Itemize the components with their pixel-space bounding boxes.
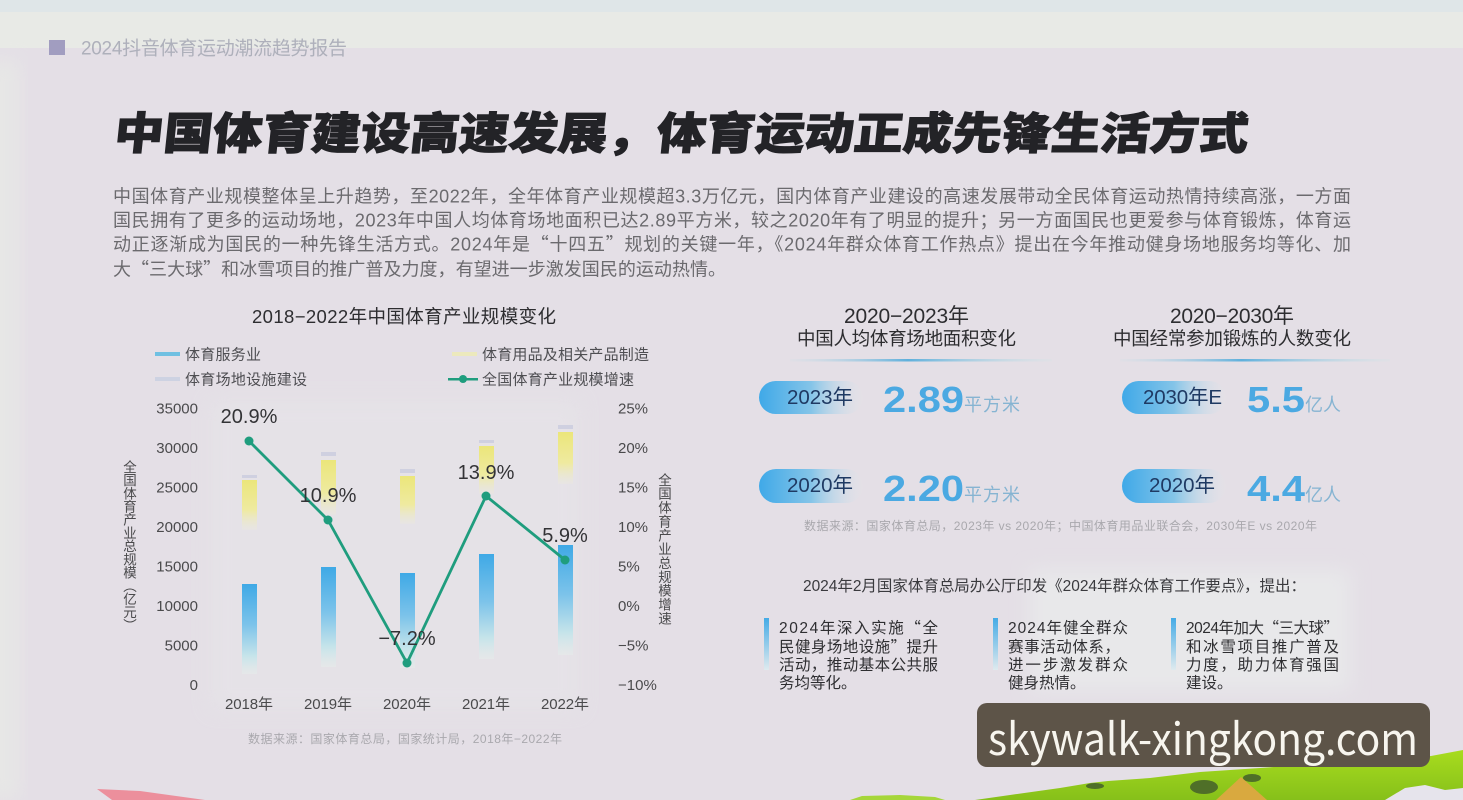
growth labels: 13.9%: [458, 462, 515, 484]
legend: 体育服务业: [185, 346, 261, 364]
icon: header square: [49, 40, 65, 55]
right axis: 5%: [618, 558, 640, 576]
panel: regular exercisers: [1113, 305, 1390, 509]
stat: 2020: [759, 468, 1020, 509]
left axis: [156, 400, 198, 694]
stat: 2023: 平方米: [964, 395, 1020, 415]
policy item 1: 务均等化。: [779, 674, 857, 692]
stat: 2020: 2020年: [787, 474, 853, 497]
intro text block: 大“三大球”和冰雪项目的推广普及力度，有望进一步激发国民的运动热情。: [113, 256, 726, 282]
stat: 2030E: 2030年E: [1143, 386, 1222, 409]
right axis: 15%: [618, 480, 648, 496]
right axis: 25%: [618, 400, 648, 418]
stat: 2023: 2023年: [787, 386, 853, 409]
intro text block: [113, 186, 1351, 282]
header text: 2024抖音体育运动潮流趋势报告: [81, 38, 347, 60]
right axis: 10%: [618, 519, 648, 536]
panel: per-capita sports area: [759, 305, 1052, 509]
intro text block: 国民拥有了更多的运动场地，2023年中国人均体育场地面积已达2.89平方米，较之2020年有了明显的提升；另一方面国民也更爱参与体育锻炼，体育运: [113, 210, 1351, 230]
panel heading: [1113, 305, 1351, 349]
policy item 1: 2024年深入实施“全: [779, 616, 938, 638]
growth labels: [221, 406, 588, 650]
policy item 1: 活动，推动基本公共服: [779, 656, 938, 674]
panel heading: 中国经常参加锻炼的人数变化: [1113, 328, 1351, 349]
policy item 2: 进一步激发群众: [1008, 656, 1128, 674]
panel heading: 中国人均体育场地面积变化: [797, 328, 1016, 349]
tent: [1216, 777, 1267, 800]
stat: 2030E: 5.5: [1247, 379, 1305, 420]
stat: 2023: 2.89: [883, 379, 964, 420]
intro text block: 动正逐渐成为国民的一种先锋生活方式。2024年是“十四五”规划的关键一年，《2024年群众体育工作热点》提出在今年推动健身场地服务均等化、加: [113, 230, 1351, 256]
stat: 2020: 平方米: [964, 485, 1020, 505]
right axis title: 全国体育产业总规模增速: [655, 472, 675, 626]
policy item 1: [764, 616, 938, 692]
growth labels: 5.9%: [542, 525, 588, 547]
stat: 2030E: [1122, 379, 1341, 420]
right axis: −10%: [618, 677, 657, 694]
title: 中国体育建设高速发展，体育运动正成先锋生活方式: [112, 98, 1252, 162]
stat: 2023: [759, 379, 1020, 420]
stacked bars: [242, 425, 573, 674]
header tag: [49, 38, 347, 60]
panel: policy points: [764, 577, 1339, 692]
stat: 2020: 2.20: [883, 468, 964, 509]
year labels: 2021年: [462, 696, 510, 713]
right axis: 0%: [618, 598, 640, 615]
growth line: [244, 436, 570, 668]
legend: [155, 346, 649, 388]
panel heading: 2020−2023年: [844, 305, 969, 328]
year labels: 2019年: [304, 696, 352, 713]
left axis: 25000: [156, 480, 198, 496]
footer illustration: green hills and tent: [850, 750, 1463, 800]
intro text block: 中国体育产业规模整体呈上升趋势，至2022年，全年体育产业规模超3.3万亿元，国内体育产业建设的高速发展带动全民体育运动热情持续高涨，一方面: [113, 186, 1351, 206]
panel heading: 2020−2030年: [1170, 305, 1294, 328]
year labels: 2022年: [541, 696, 589, 713]
left axis: 0: [190, 677, 198, 694]
policy item 3: 和冰雪项目推广普及: [1186, 638, 1339, 656]
legend: 体育场地设施建设: [185, 372, 307, 388]
footer illustration: pink shape: [97, 789, 205, 800]
legend: 体育用品及相关产品制造: [482, 346, 649, 364]
policy item 3: 2024年加大“三大球”: [1186, 616, 1339, 638]
policy item 3: 力度，助力体育强国: [1186, 656, 1339, 674]
left axis: 30000: [156, 440, 198, 457]
stat: 2020: 4.4: [1247, 468, 1305, 509]
policy item 3: 建设。: [1186, 674, 1233, 692]
policy item 2: [993, 618, 1128, 692]
year labels: 2018年: [225, 696, 273, 713]
chart heading: 2018−2022年中国体育产业规模变化: [252, 306, 556, 327]
left axis: 10000: [156, 598, 198, 615]
policy item 2: 健身热情。: [1008, 674, 1086, 692]
policy heading: 2024年2月国家体育总局办公厅印发《2024年群众体育工作要点》，提出：: [803, 577, 1306, 595]
year labels: [225, 696, 589, 713]
left axis title: 全国体育产业总规模（亿元）: [120, 459, 140, 632]
growth labels: 10.9%: [300, 485, 357, 507]
growth labels: −7.2%: [378, 628, 436, 650]
year labels: 2020年: [383, 696, 431, 713]
left axis: 15000: [156, 558, 198, 576]
policy item 1: 民健身场地设施”提升: [779, 635, 938, 657]
right axis: [618, 400, 657, 694]
stat: 2020: 亿人: [1305, 485, 1341, 505]
stat: 2030E: 亿人: [1305, 395, 1341, 415]
left axis: 35000: [156, 400, 198, 418]
policy item 2: 2024年健全群众: [1008, 619, 1128, 637]
policy item 2: 赛事活动体系，: [1008, 637, 1120, 656]
policy item 3: [1171, 616, 1339, 692]
panel heading: [797, 305, 1016, 349]
stat: 2020: 2020年: [1149, 474, 1215, 497]
panel: industry scale chart: [120, 306, 675, 746]
right axis: 20%: [618, 440, 648, 457]
left axis: 5000: [165, 638, 198, 654]
chart source: 数据来源：国家体育总局，国家统计局，2018年−2022年: [248, 731, 562, 746]
right axis: −5%: [618, 638, 648, 654]
left axis: 20000: [156, 519, 198, 536]
growth labels: 20.9%: [221, 406, 278, 428]
stats source: 数据来源：国家体育总局，2023年 vs 2020年；中国体育用品业联合会，2030年E vs 2020年: [804, 518, 1317, 533]
stat: 2020: [1122, 468, 1341, 509]
tree: [1086, 774, 1261, 794]
legend: 全国体育产业规模增速: [482, 370, 634, 388]
watermark: skywalk-xingkong.com: [988, 704, 1418, 768]
